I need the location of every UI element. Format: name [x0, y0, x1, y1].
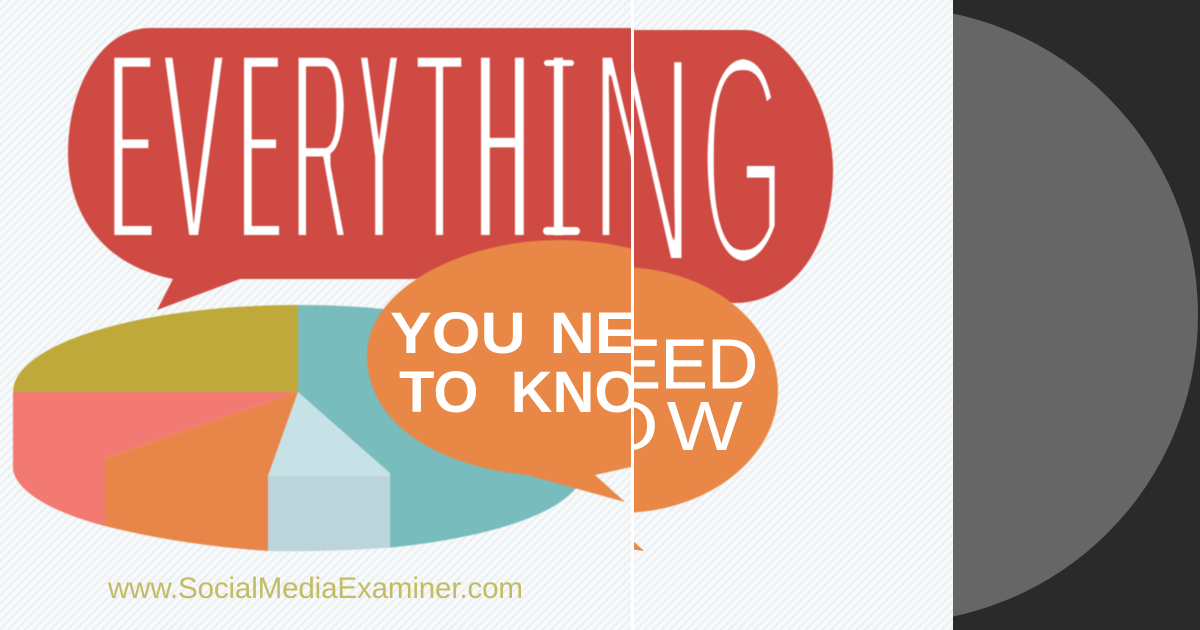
title letters: left slice, straight [114, 57, 564, 236]
title letter G: G [700, 0, 785, 329]
orange tail tip [634, 542, 644, 551]
panel: left image slice [0, 0, 753, 630]
title letters: left slice, straight: Y [359, 0, 399, 300]
title letters: left slice, straight: I [548, 0, 569, 300]
red speech bubble, right part [634, 29, 834, 304]
right paper background [634, 0, 953, 630]
title letters: left slice, straight: H [476, 0, 529, 300]
subtitle: YOU NE: YOU NEED [390, 300, 724, 365]
orange speech bubble, right part [634, 267, 779, 514]
website url: www.SocialMediaExaminer.com [107, 572, 523, 605]
pie slice: orange [105, 392, 298, 551]
title letters: left slice, wide: V [163, 0, 224, 300]
serif bars of letter I [543, 60, 580, 235]
title letters: left slice, wide [164, 57, 462, 236]
pie chart [13, 305, 583, 551]
pie slice: light blue side [268, 476, 390, 551]
title letters: left slice, wide: T [416, 0, 463, 300]
subtitle: OW: OW [596, 387, 743, 465]
orange speech bubble [366, 240, 631, 502]
pie slice: teal [298, 305, 583, 548]
title letter N, right slice: N [612, 0, 691, 329]
panel: right image slice [634, 0, 953, 630]
white seam [631, 0, 634, 630]
pie slice: light blue top [268, 392, 390, 476]
title letters: left slice, straight: E [110, 0, 153, 300]
title letters: left slice, straight: E [240, 0, 281, 300]
pie slice: coral [13, 392, 298, 526]
red speech bubble [68, 28, 640, 310]
title letter N, left slice: N [593, 0, 669, 300]
subtitle: EED: EED [614, 325, 758, 403]
pie slice: olive [13, 305, 298, 392]
left paper background [0, 0, 631, 630]
title letters: left slice, wide: R [292, 0, 350, 299]
grey circle [582, 7, 1198, 623]
subtitle: TO KNO: TO KNOW [399, 360, 694, 425]
